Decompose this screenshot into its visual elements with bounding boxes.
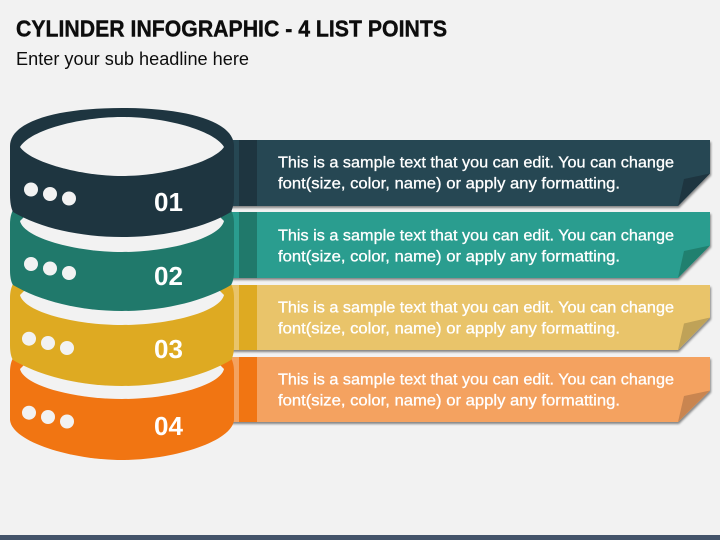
cylinder segment 4: 04 xyxy=(154,411,183,441)
panel: list bar 1: This is a sample text that you can edit. You can change xyxy=(278,154,674,172)
panel: list bar 4: This is a sample text that you can edit. You can change xyxy=(278,372,674,388)
subtitle: Enter your sub headline here xyxy=(16,49,249,69)
cylinder segment 1: 01 xyxy=(154,187,183,217)
panel: list bar 4 xyxy=(230,357,710,422)
panel: list bar 2: This is a sample text that you can edit. You can change xyxy=(278,228,674,244)
panel: list bar 3: This is a sample text that you can edit. You can change xyxy=(278,300,674,316)
cylinder segment 2 xyxy=(10,210,234,311)
panel: list bar 2 xyxy=(230,212,710,278)
panel: list bar 3: font(size, color, name) or apply any formatting. xyxy=(278,320,620,338)
panel: list bar 3 xyxy=(230,285,710,350)
title: CYLINDER INFOGRAPHIC - 4 LIST POINTS xyxy=(16,16,447,42)
panel: list bar 1: font(size, color, name) or apply any formatting. xyxy=(278,176,620,192)
cylinder segment 3 xyxy=(10,284,234,386)
panel: list bar 1 xyxy=(230,140,710,206)
cylinder segment 4 xyxy=(10,358,234,460)
footer bar xyxy=(0,535,720,540)
cylinder segment 1 xyxy=(10,108,234,237)
cylinder segment 3: 03 xyxy=(154,334,183,364)
cylinder segment 2: 02 xyxy=(154,261,183,291)
panel: list bar 2: font(size, color, name) or apply any formatting. xyxy=(278,248,620,266)
panel: list bar 4: font(size, color, name) or apply any formatting. xyxy=(278,392,620,410)
